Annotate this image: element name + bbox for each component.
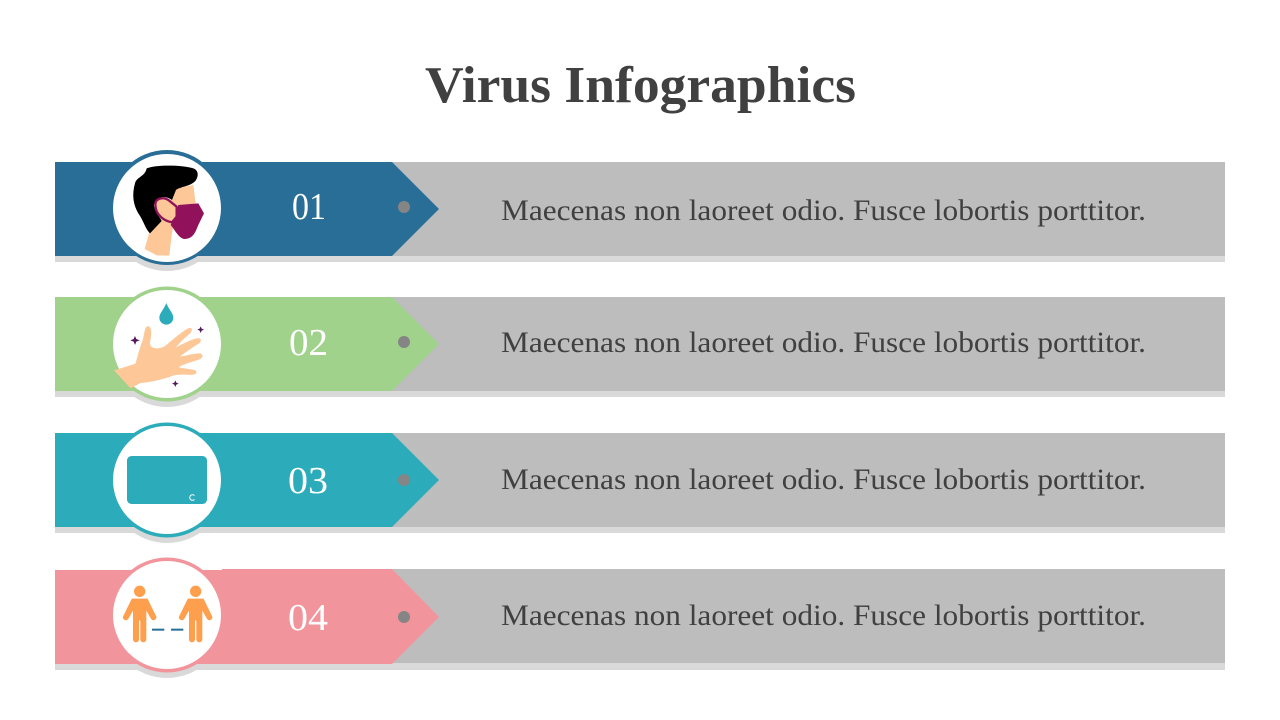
dot 04: [398, 611, 410, 623]
description 01: Maecenas non laoreet odio. Fusce lobortis porttitor.: [501, 195, 1146, 227]
arrow banner 01: [55, 162, 439, 256]
icon: face with mask: [133, 166, 204, 256]
badge ring 04: [110, 558, 224, 672]
panel: row 04: [55, 558, 1225, 678]
badge ring 03: [110, 422, 224, 538]
dot 03: [398, 474, 410, 486]
icon: tablet card: [127, 456, 207, 504]
arrow banner 04: [55, 569, 439, 664]
number 03: 03: [288, 460, 328, 502]
badge ring 02: [110, 286, 224, 402]
icon: hand with water drop: [115, 303, 204, 388]
title: Virus Infographics: [425, 57, 856, 114]
description 04: Maecenas non laoreet odio. Fusce lobortis porttitor.: [501, 600, 1146, 632]
arrow banner 02: [55, 297, 439, 391]
number 04: 04: [288, 597, 328, 639]
badge ring 01: [110, 150, 224, 265]
arrow banner 03: [55, 433, 439, 527]
dot 01: [398, 201, 410, 213]
number 01: 01: [292, 186, 326, 228]
dot 02: [398, 336, 410, 348]
panel: row 02: [55, 286, 1225, 407]
description 03: Maecenas non laoreet odio. Fusce lobortis porttitor.: [501, 464, 1146, 496]
icon: two people keeping distance: [123, 586, 212, 642]
panel: row 03: [55, 422, 1225, 543]
panel: row 01: [55, 150, 1225, 271]
description 02: Maecenas non laoreet odio. Fusce lobortis porttitor.: [501, 327, 1146, 359]
number 02: 02: [289, 322, 328, 364]
